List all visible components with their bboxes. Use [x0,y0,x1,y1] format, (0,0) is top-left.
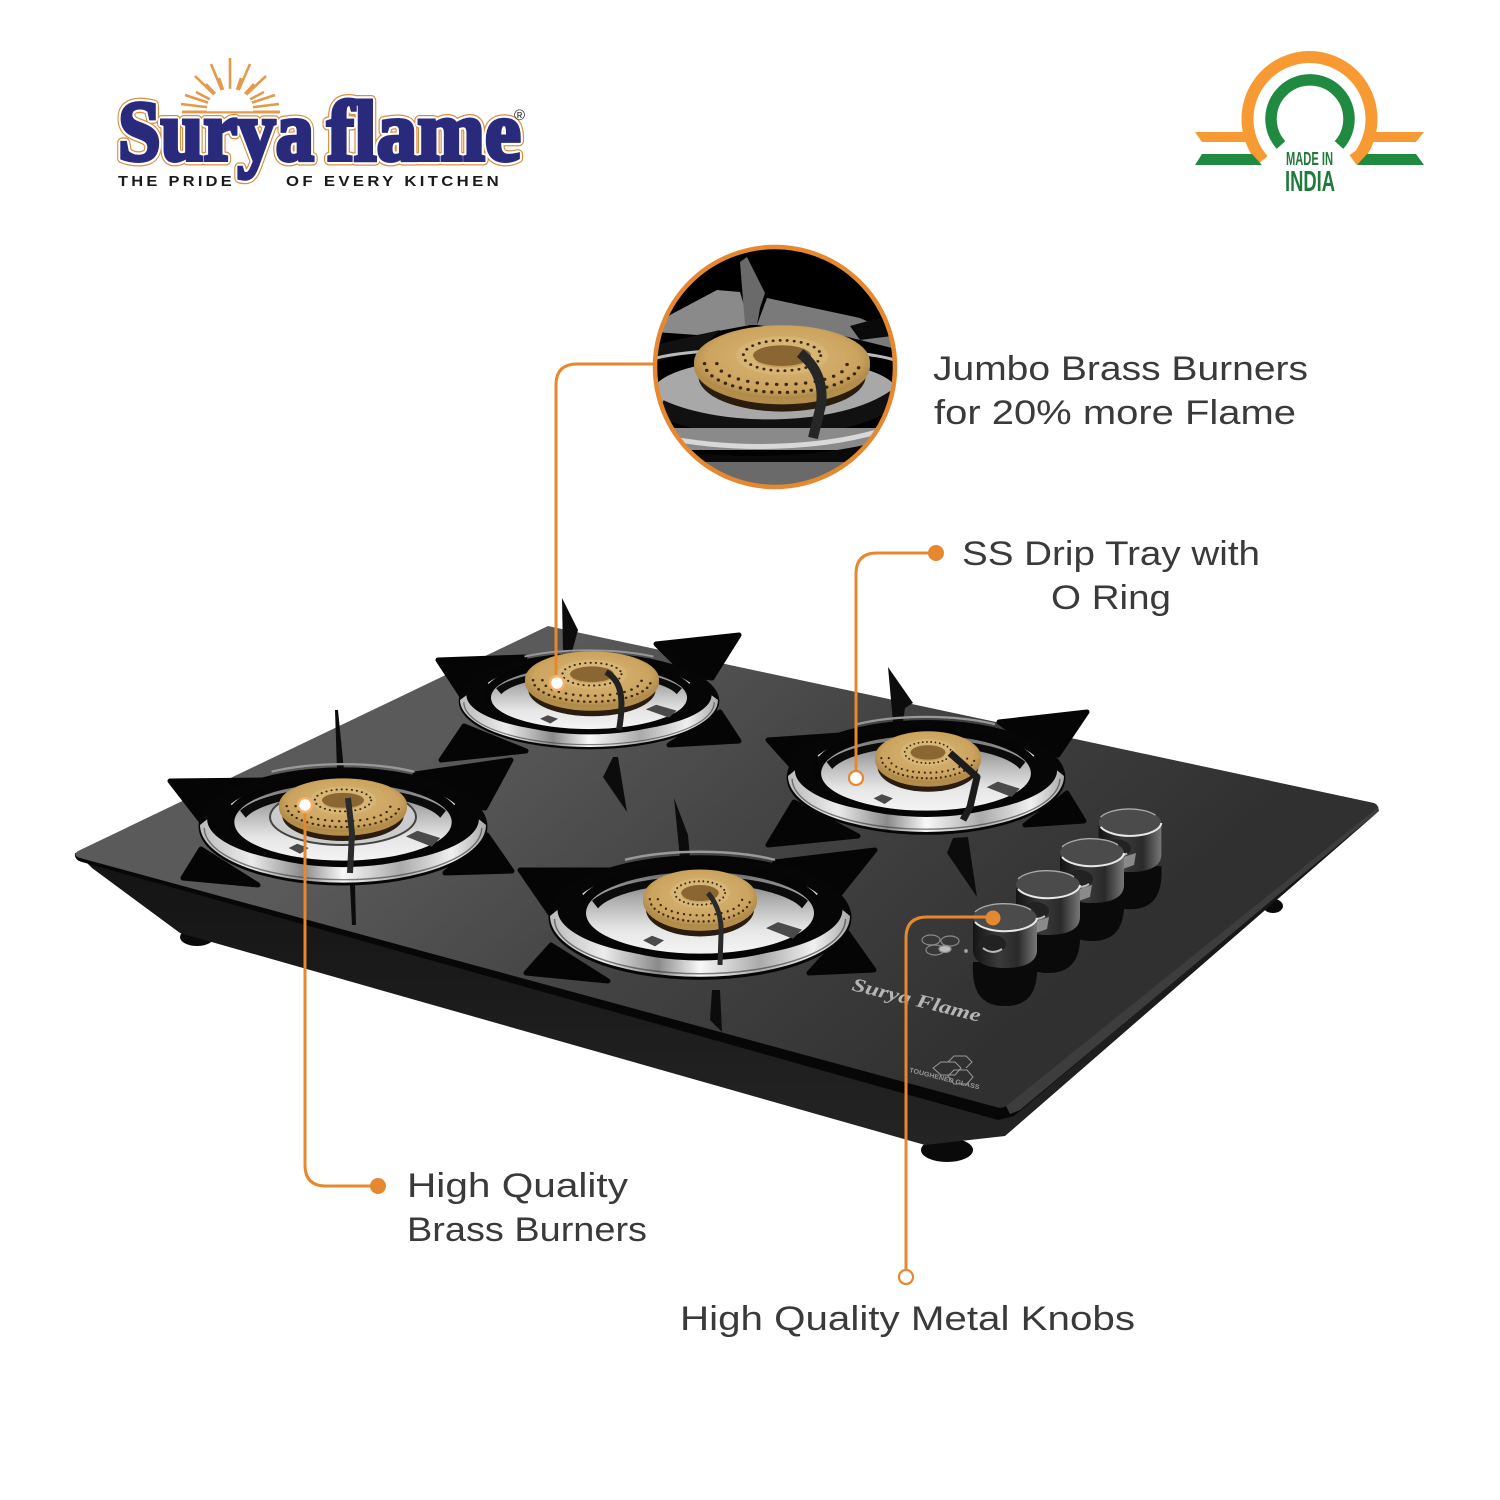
burner: front [520,798,875,1032]
product: gas cooktop [75,598,1379,1162]
logo wordmark [118,83,521,179]
logo wordmark: flame [327,83,521,179]
glass toughened mark: TOUGHENED GLASS [909,1067,981,1092]
zoomed burner detail circle [650,247,900,492]
callout: high quality brass burners: Brass Burners [407,1211,647,1249]
icon: rising sun [181,58,280,112]
callout: metal knobs: High Quality Metal Knobs [680,1300,1135,1338]
badge: Made in India: MADE IN [1286,149,1333,169]
callout: high quality brass burners: High Quality [407,1167,628,1205]
callout: SS drip tray: O Ring [1051,579,1171,617]
callout: jumbo brass burners: for 20% more Flame [934,394,1296,432]
logo tagline: OF EVERY KITCHEN [286,173,502,190]
callout: metal knobs [680,910,1135,1338]
callout: jumbo brass burners: Jumbo Brass Burners [933,350,1308,388]
logo wordmark: flame [327,83,521,179]
registered mark: ® [514,107,525,124]
glass side bevel [1006,806,1379,1114]
glass toughened mark [909,1056,981,1092]
callout: high quality brass burners [298,798,647,1249]
logo wordmark: Surya [118,83,314,179]
icon: burner layout on glass [922,935,968,955]
glass top surface [75,626,1378,1108]
callout: SS drip tray: SS Drip Tray with [962,535,1260,573]
callout: jumbo brass burners [550,350,1308,690]
logo wordmark: flame [327,83,521,179]
burner: right [768,667,1087,897]
glass front edge [75,810,1378,1120]
burner: rear left [438,598,739,812]
logo wordmark: Surya [118,83,314,179]
badge: Made in India [1195,57,1424,198]
burner: left [170,710,512,925]
logo wordmark: Surya [118,83,314,179]
callout: SS drip tray [849,535,1260,785]
badge: Made in India: INDIA [1285,166,1335,198]
logo tagline: THE PRIDE [118,173,235,190]
glass brand print: Surya Flame [850,974,984,1027]
logo tagline [118,173,502,190]
cooktop base [82,812,1378,1145]
cooktop feet [180,899,1283,1162]
control knobs [973,809,1162,1006]
logo: Surya Flame [118,58,525,190]
